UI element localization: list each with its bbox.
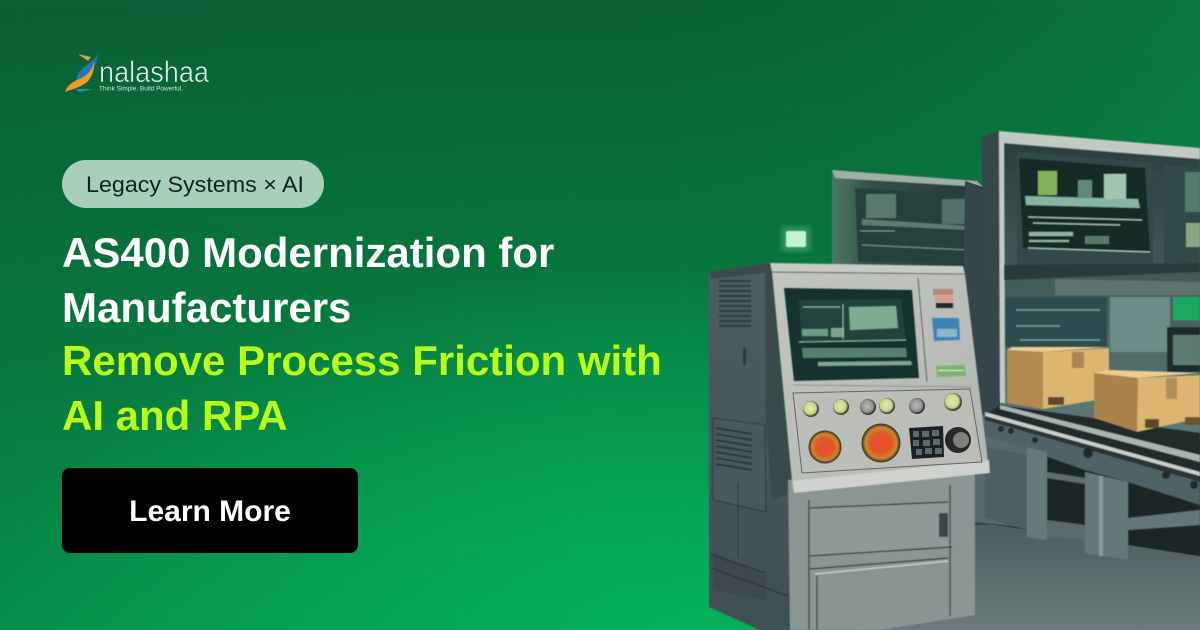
button: learn more: Learn More	[129, 495, 291, 528]
logo tagline: Think Simple. Build Powerful.	[99, 86, 183, 92]
backdrop behind conveyor	[960, 400, 1200, 570]
icon: logo swirl	[65, 51, 99, 92]
keypad	[909, 426, 944, 459]
cabinet base	[788, 462, 975, 630]
cabinet lock	[939, 513, 948, 537]
headline lime	[62, 337, 662, 439]
small buttons	[803, 393, 962, 417]
headline white	[62, 229, 554, 331]
cabinet side	[709, 263, 793, 630]
button: learn more	[62, 468, 358, 553]
rotary knob	[945, 427, 971, 453]
headline lime: AI and RPA	[62, 392, 288, 439]
headline lime: Remove Process Friction with	[62, 337, 662, 384]
lower reflection screen	[1005, 297, 1200, 372]
cardboard box: left	[1007, 347, 1109, 409]
conveyor	[975, 405, 1200, 560]
side vent: upper	[719, 281, 751, 326]
indicator lights	[932, 289, 966, 377]
logo: nalashaa	[65, 51, 209, 92]
factory illustration	[709, 131, 1200, 630]
floor	[880, 500, 1200, 630]
conveyor legs	[985, 447, 1200, 560]
glowing square	[782, 227, 810, 251]
headline white: Manufacturers	[62, 284, 351, 331]
logo wordmark: nalashaa	[99, 56, 209, 89]
monitor: rear left	[832, 170, 983, 300]
button panel	[793, 389, 982, 473]
control panel screen	[784, 288, 919, 381]
right screen	[1164, 165, 1200, 263]
tag pill	[62, 160, 324, 208]
emergency stop: right	[862, 424, 900, 462]
cardboard box: right	[1094, 370, 1200, 432]
tag pill: Legacy Systems × AI	[86, 172, 304, 197]
side vent: lower	[716, 428, 752, 470]
emergency stop: left	[808, 430, 842, 464]
left screen	[1017, 152, 1153, 265]
headline	[62, 229, 662, 439]
headline white: AS400 Modernization for	[62, 229, 554, 276]
machine cabinet	[709, 263, 990, 630]
control panel face	[770, 263, 990, 493]
monitor wall: right	[982, 131, 1200, 440]
